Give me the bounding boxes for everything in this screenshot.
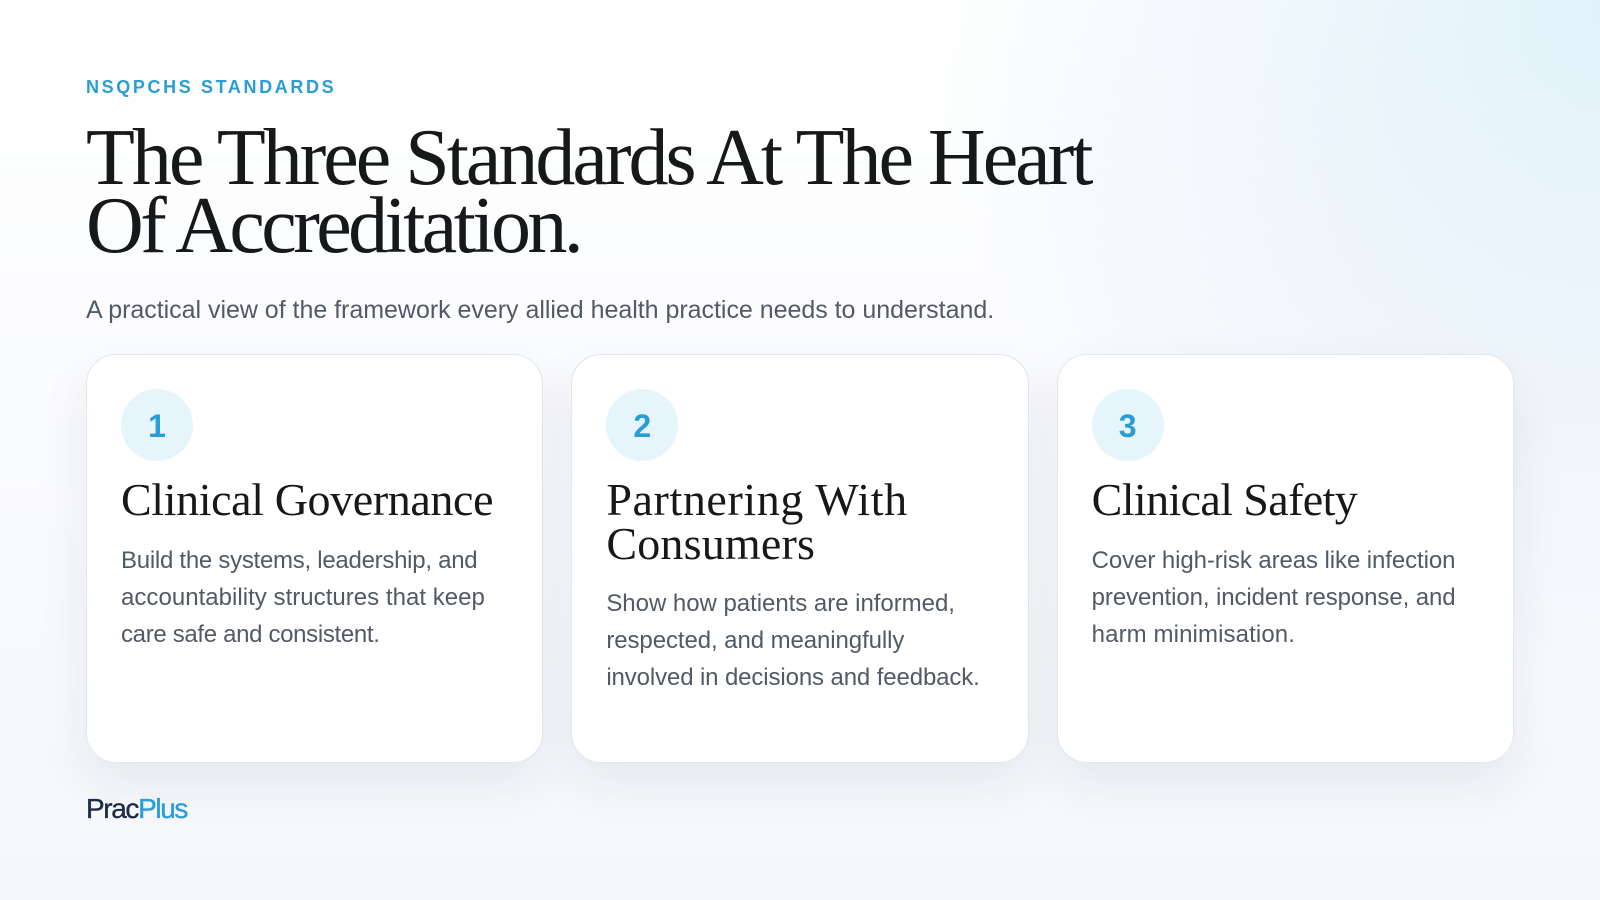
title: The Three Standards At The Heart (86, 114, 1090, 202)
panel: partnering with consumers (571, 354, 1029, 763)
text: clinical safety: harm minimisation. (1092, 621, 1295, 648)
text: partnering with consumers: Show how patients are informed, (606, 590, 955, 617)
panel: clinical governance (86, 354, 543, 763)
heading: partnering with consumers (606, 474, 908, 568)
heading: partnering with consumers: Consumers (606, 518, 815, 568)
heading: clinical governance: Clinical Governance (121, 474, 493, 525)
number badge 1 (121, 389, 193, 461)
heading: partnering with consumers: Partnering With (606, 474, 908, 524)
number badge 2: 2 (633, 408, 651, 444)
text: clinical governance (121, 547, 485, 648)
title (86, 114, 1093, 270)
number badge 3 (1092, 389, 1164, 461)
text: partnering with consumers: involved in decisions and feedback. (606, 664, 980, 691)
text: clinical governance: care safe and consistent. (121, 621, 380, 648)
panel: clinical safety (1057, 354, 1514, 763)
eyebrow label: NSQPCHS STANDARDS (86, 77, 336, 97)
number badge 2 (606, 389, 678, 461)
text: clinical safety: Cover high-risk areas like infection (1092, 547, 1455, 574)
number badge 3: 3 (1119, 408, 1137, 444)
text: clinical safety: prevention, incident response, and (1092, 584, 1456, 611)
number badge 1: 1 (148, 408, 166, 444)
text: clinical governance: Build the systems, leadership, and (121, 547, 477, 574)
text: partnering with consumers: respected, and meaningfully (606, 627, 904, 654)
text: clinical governance: accountability structures that keep (121, 584, 485, 611)
subtitle: A practical view of the framework every allied health practice needs to understand. (86, 296, 994, 324)
logo: PracPlus: PracPlus (86, 793, 187, 824)
heading: clinical safety: Clinical Safety (1092, 474, 1357, 525)
text: clinical safety (1092, 547, 1456, 648)
title: Of Accreditation. (86, 182, 580, 270)
text: partnering with consumers (606, 590, 980, 691)
